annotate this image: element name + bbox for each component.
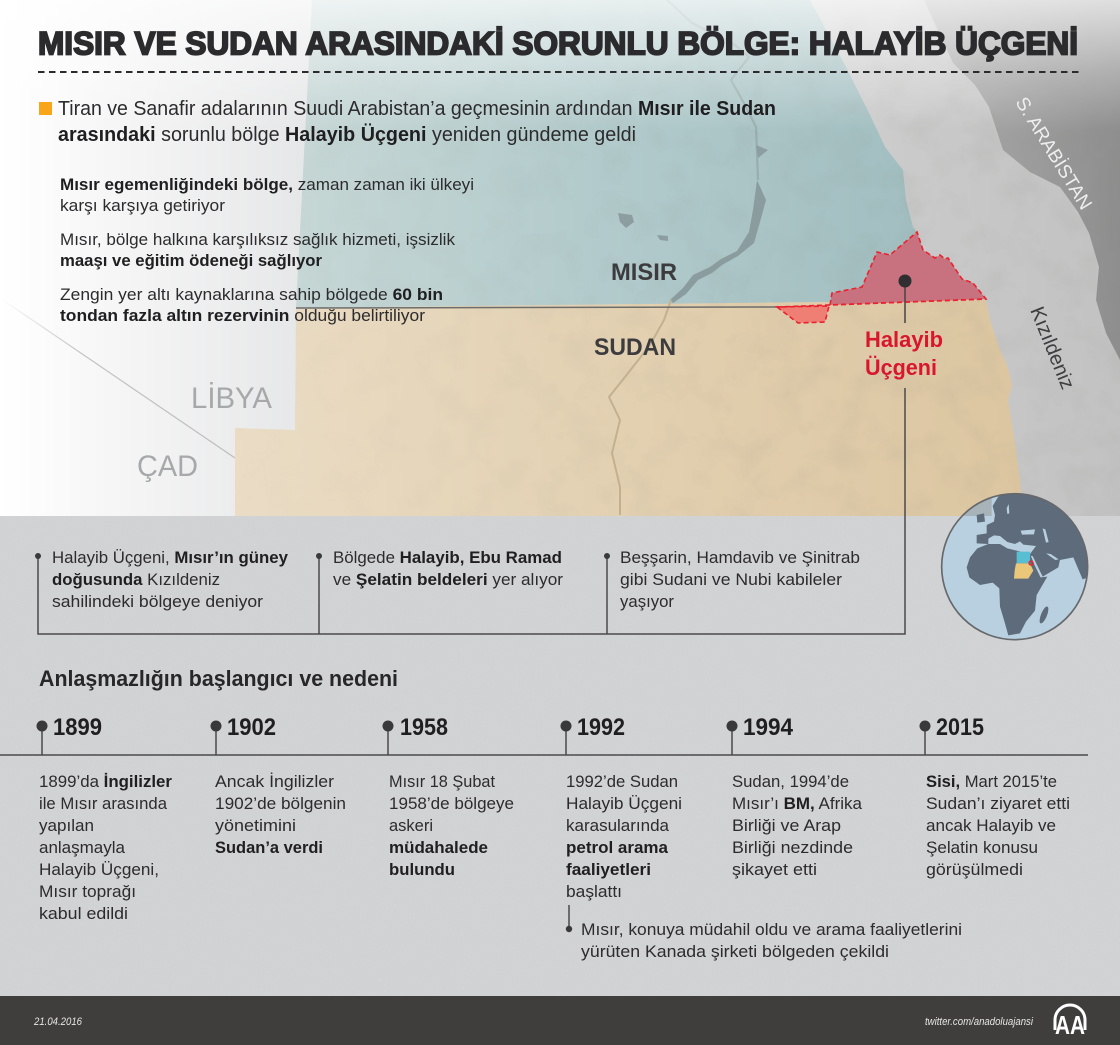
lower panel background <box>0 516 1120 996</box>
timeline: 1992: faaliyetleri <box>566 860 651 879</box>
text block: Egypt control facts: karşı karşıya getiriyor <box>60 196 225 215</box>
connector lines <box>35 388 905 634</box>
timeline: 1902: Sudan’a verdi <box>215 838 323 857</box>
timeline: 1902: 1902’de bölgenin <box>215 794 346 813</box>
map label: Halayib Triangle: Halayib <box>865 327 943 352</box>
timeline: 1899: Halayib Üçgeni, <box>39 860 159 879</box>
info column: location <box>52 548 289 611</box>
map background <box>0 0 1120 516</box>
timeline axis <box>0 754 1088 756</box>
river Nile and Lake Nasser <box>609 0 768 515</box>
timeline: 1899: anlaşmayla <box>39 838 126 857</box>
timeline: 1899: yapılan <box>39 816 94 835</box>
timeline: 2015: ancak Halayib ve <box>926 816 1056 835</box>
timeline: 1994: Mısır’ı BM, Afrika <box>732 794 863 813</box>
timeline: 1992: başlattı <box>566 882 622 901</box>
info column: location: Halayib Üçgeni, Mısır’ın güney <box>52 548 289 567</box>
map label: Saudi Arabia: S. ARABİSTAN <box>1011 94 1096 214</box>
timeline: 1992: Halayib Üçgeni <box>566 794 682 813</box>
text block: Egypt control facts: Zengin yer altı kaynaklarına sahip bölgede 60 bin <box>60 285 443 304</box>
panel texture <box>0 516 1120 996</box>
timeline: 1994: Birliği ve Arap <box>732 816 841 835</box>
timeline: 1899: 1899’da İngilizler <box>39 772 172 791</box>
map label: Halayib Triangle <box>865 327 943 380</box>
map texture <box>786 372 882 462</box>
region: Halayib Triangle <box>777 232 986 323</box>
info column: towns: ve Şelatin beldeleri yer alıyor <box>333 570 563 589</box>
text block: Egypt control facts: tondan fazla altın rezervinin olduğu belirtiliyor <box>60 306 425 325</box>
timeline: 1992 <box>560 714 682 901</box>
timeline heading: Anlaşmazlığın başlangıcı ve nedeni <box>39 666 398 691</box>
timeline: 1992: petrol arama <box>566 838 669 857</box>
text block: Egypt control facts <box>60 175 474 325</box>
timeline: 1994: 1994 <box>743 714 794 741</box>
timeline: 1899 <box>36 714 172 923</box>
intro text: Tiran ve Sanafir adalarının Suudi Arabistan’a geçmesinin ardından Mısır ile Sudan <box>58 98 776 120</box>
map label: Sudan: SUDAN <box>594 334 676 361</box>
timeline: 1994: Birliği nezdinde <box>732 838 853 857</box>
timeline: 2015: 2015 <box>936 714 984 741</box>
info column: tribes: Beşşarin, Hamdavib ve Şinitrab <box>620 548 860 567</box>
timeline: 1902 <box>210 714 346 857</box>
timeline: 1992: karasularında <box>566 816 670 835</box>
map label: Red Sea: Kızıldeniz <box>1025 304 1078 393</box>
intro text: arasındaki sorunlu bölge Halayib Üçgeni yeniden gündeme geldi <box>58 123 636 146</box>
timeline: 1958: askeri <box>389 816 433 835</box>
footer twitter: twitter.com/anadoluajansi <box>925 1016 1033 1028</box>
top fade <box>142 0 1120 116</box>
timeline: 2015: Sisi, Mart 2015’te <box>926 772 1057 791</box>
info column: location: doğusunda Kızıldeniz <box>52 570 220 589</box>
info column: tribes <box>620 548 860 611</box>
footer bar <box>0 996 1120 1045</box>
timeline: 2015: görüşülmedi <box>926 860 1023 879</box>
icon: AA logo: AA <box>1055 1010 1085 1040</box>
info column: tribes: yaşıyor <box>620 592 674 611</box>
timeline: 1992 note: yürüten Kanada şirketi bölgeden çekildi <box>581 942 889 961</box>
timeline: 1958: müdahalede <box>389 838 488 857</box>
timeline: 1899: kabul edildi <box>39 904 128 923</box>
border: Libya Chad <box>0 298 235 458</box>
text block: Egypt control facts: maaşı ve eğitim ödeneği sağlıyor <box>60 251 322 270</box>
footer date: 21.04.2016 <box>33 1016 83 1028</box>
map label: Halayib Triangle: Üçgeni <box>865 355 937 380</box>
info column: location: sahilindeki bölgeye deniyor <box>52 592 263 611</box>
region: Egypt <box>296 0 917 308</box>
title: MISIR VE SUDAN ARASINDAKİ SORUNLU BÖLGE: HALAYİB ÜÇGENİ <box>38 26 1078 62</box>
timeline: 1902: Ancak İngilizler <box>215 772 334 791</box>
text block: Egypt control facts: Mısır egemenliğindeki bölge, zaman zaman iki ülkeyi <box>60 175 474 194</box>
timeline: 1958: bulundu <box>389 860 455 879</box>
timeline: 1902: 1902 <box>227 714 276 741</box>
region: Sudan <box>235 300 1023 516</box>
locator pin <box>898 274 912 323</box>
info column: tribes: gibi Sudani ve Nubi kabileler <box>620 570 842 589</box>
map label: Libya: LİBYA <box>191 382 272 415</box>
timeline: 1899: 1899 <box>53 714 102 741</box>
info column: towns <box>333 548 563 589</box>
timeline: 1992 note <box>566 905 962 961</box>
timeline: 1992: 1992 <box>577 714 625 741</box>
timeline: 1992: 1992’de Sudan <box>566 772 678 791</box>
timeline: 1992 note: Mısır, konuya müdahil oldu ve arama faaliyetlerini <box>581 920 962 939</box>
timeline: 2015 <box>920 714 1070 879</box>
locator globe <box>940 492 1088 640</box>
seas on globe <box>1007 504 1059 577</box>
info column: towns: Bölgede Halayib, Ebu Ramad <box>333 548 562 567</box>
text block: Egypt control facts: Mısır, bölge halkına karşılıksız sağlık hizmeti, işsizlik <box>60 230 455 249</box>
map label: Chad: ÇAD <box>137 450 198 483</box>
timeline: 1958: 1958 <box>400 714 448 741</box>
timeline: 1899: Mısır toprağı <box>39 882 136 901</box>
map label: Egypt: MISIR <box>611 259 677 286</box>
timeline: 1994: Sudan, 1994’de <box>732 772 849 791</box>
timeline: 1958 <box>382 714 514 879</box>
timeline: 1994: şikayet etti <box>732 860 817 879</box>
intro text <box>39 98 776 146</box>
timeline: 2015: Şelatin konusu <box>926 838 1038 857</box>
timeline: 1899: ile Mısır arasında <box>39 794 168 813</box>
border: Egypt Sudan <box>296 307 778 308</box>
timeline: 1902: yönetimini <box>215 816 296 835</box>
region: Saudi Arabia land <box>924 0 1120 360</box>
title divider <box>38 71 1082 73</box>
timeline: 1994 <box>726 714 863 879</box>
timeline: 1958: Mısır 18 Şubat <box>389 772 495 791</box>
timeline: 1958: 1958’de bölgeye <box>389 794 514 813</box>
timeline: 2015: Sudan’ı ziyaret etti <box>926 794 1070 813</box>
